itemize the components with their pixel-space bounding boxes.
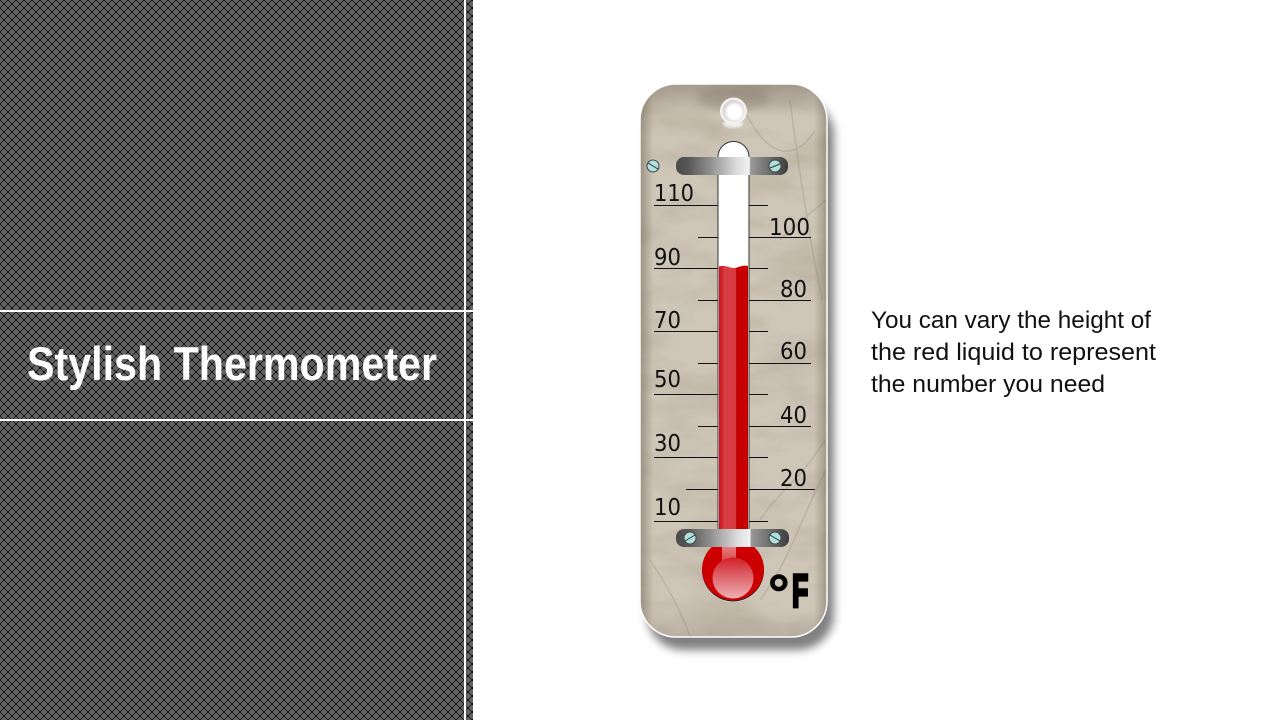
scale numbers: 10 [654,495,681,521]
description text: the number you need [871,371,1105,398]
scale tick marks [654,206,815,522]
thermometer [640,84,834,650]
scale numbers: 30 [654,431,681,457]
scale numbers: 50 [654,367,681,393]
scale numbers [654,181,810,521]
description text: You can vary the height of [871,307,1151,334]
wooden plate [640,84,827,637]
scale numbers: 80 [780,277,807,303]
hanging hole [720,98,747,128]
scale numbers: 20 [780,466,807,492]
degree F unit [768,564,808,624]
bottom clamp [676,529,789,547]
description text [871,307,1156,398]
glass tube [718,142,749,535]
red liquid column [719,266,748,535]
screw [769,532,781,544]
scale numbers: 70 [654,308,681,334]
top clamp [676,157,788,175]
title: Stylish Thermometer [27,337,437,390]
scale numbers: 90 [654,245,681,271]
scale numbers: 100 [769,215,810,241]
plate shadow [647,99,834,650]
description text: the red liquid to represent [871,339,1156,366]
scale numbers: 110 [654,181,694,207]
scale numbers: 40 [780,403,807,429]
degree F unit: F [792,565,808,616]
panel: patterned left sidebar [0,0,473,720]
degree F unit: ° [768,564,790,624]
left screw [647,160,659,172]
bulb [702,538,764,602]
screw [684,532,696,544]
scale numbers: 60 [780,339,807,365]
screw [769,160,781,172]
